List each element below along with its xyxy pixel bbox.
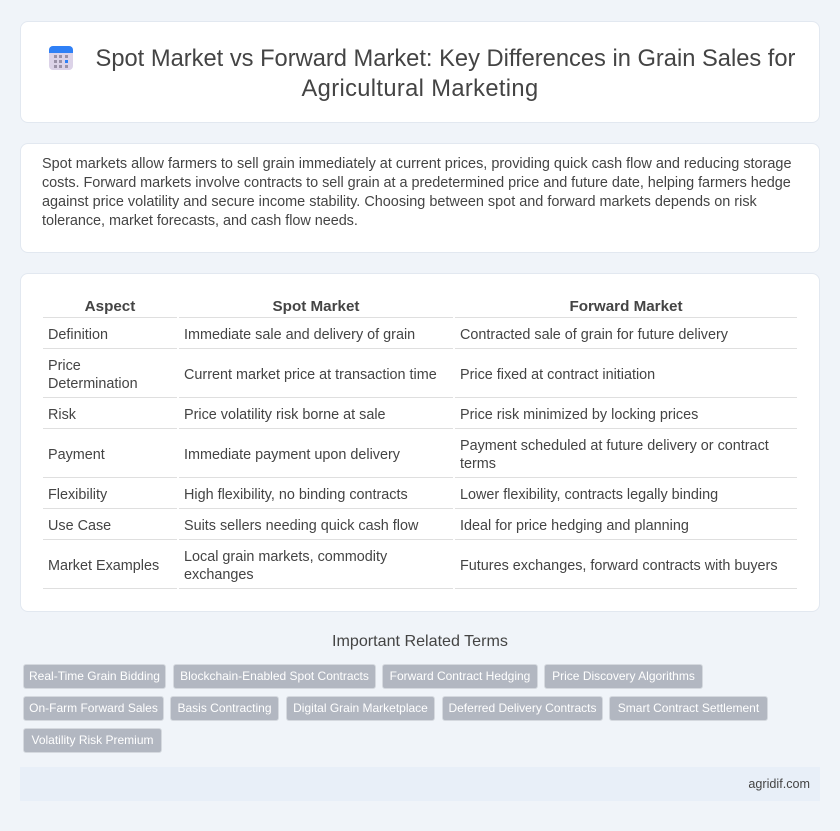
table panel <box>20 273 820 612</box>
related term tags <box>23 664 768 753</box>
comparison table: Lower flexibility, contracts legally binding <box>460 487 718 503</box>
comparison table: Risk <box>48 407 76 423</box>
comparison table: Use Case <box>48 518 111 534</box>
comparison table: Ideal for price hedging and planning <box>460 518 689 534</box>
footer source: agridif.com <box>748 777 810 791</box>
related terms heading: Important Related Terms <box>332 632 508 650</box>
related term tags: Basis Contracting <box>177 701 272 715</box>
related term tags: On-Farm Forward Sales <box>29 701 158 715</box>
related term tags: Smart Contract Settlement <box>618 701 759 715</box>
comparison table: Flexibility <box>48 487 107 503</box>
comparison table: Contracted sale of grain for future delivery <box>460 327 728 343</box>
intro text <box>42 156 791 229</box>
comparison table: terms <box>460 456 496 472</box>
related term tags: Deferred Delivery Contracts <box>448 701 597 715</box>
comparison table: Payment scheduled at future delivery or contract <box>460 438 769 454</box>
comparison table: Price risk minimized by locking prices <box>460 407 698 423</box>
related term tags: Real-Time Grain Bidding <box>29 669 160 683</box>
comparison table: Spot Market <box>273 298 359 315</box>
title <box>96 46 795 102</box>
comparison table: Futures exchanges, forward contracts with buyers <box>460 558 778 574</box>
comparison table: Payment <box>48 447 105 463</box>
comparison table: Definition <box>48 327 108 343</box>
comparison table: Suits sellers needing quick cash flow <box>184 518 418 534</box>
intro text: against price volatility and secure income stability. Choosing between spot and forward markets depends on risk <box>42 194 757 210</box>
title: Spot Market vs Forward Market: Key Differences in Grain Sales for <box>96 46 795 72</box>
related term tags: Volatility Risk Premium <box>31 733 154 747</box>
comparison table: exchanges <box>184 567 254 583</box>
comparison table: Local grain markets, commodity <box>184 549 387 565</box>
intro text: tolerance, market forecasts, and cash flow needs. <box>42 213 358 229</box>
header panel <box>20 21 820 123</box>
related term tags: Forward Contract Hedging <box>390 669 530 683</box>
comparison table <box>43 298 797 589</box>
comparison table: Aspect <box>85 298 135 315</box>
comparison table: Forward Market <box>569 298 683 315</box>
related term tags: Price Discovery Algorithms <box>552 669 695 683</box>
comparison table: Market Examples <box>48 558 159 574</box>
title: Agricultural Marketing <box>302 76 538 102</box>
related term tags: Blockchain-Enabled Spot Contracts <box>180 669 369 683</box>
comparison table: Price volatility risk borne at sale <box>184 407 386 423</box>
comparison table: Determination <box>48 376 138 392</box>
footer bar <box>20 767 820 801</box>
comparison table: Immediate payment upon delivery <box>184 447 400 463</box>
related term tags: Digital Grain Marketplace <box>293 701 428 715</box>
comparison table: Current market price at transaction time <box>184 367 437 383</box>
intro panel <box>20 143 820 253</box>
intro text: Spot markets allow farmers to sell grain immediately at current prices, providing quick cash flow and reducing storage <box>42 156 791 172</box>
icon: calendar <box>49 46 73 70</box>
comparison table: Immediate sale and delivery of grain <box>184 327 415 343</box>
intro text: costs. Forward markets involve contracts to sell grain at a predetermined price and future date, helping farmers hedge <box>42 175 791 191</box>
comparison table: Price <box>48 358 81 374</box>
comparison table: Price fixed at contract initiation <box>460 367 655 383</box>
comparison table: High flexibility, no binding contracts <box>184 487 408 503</box>
